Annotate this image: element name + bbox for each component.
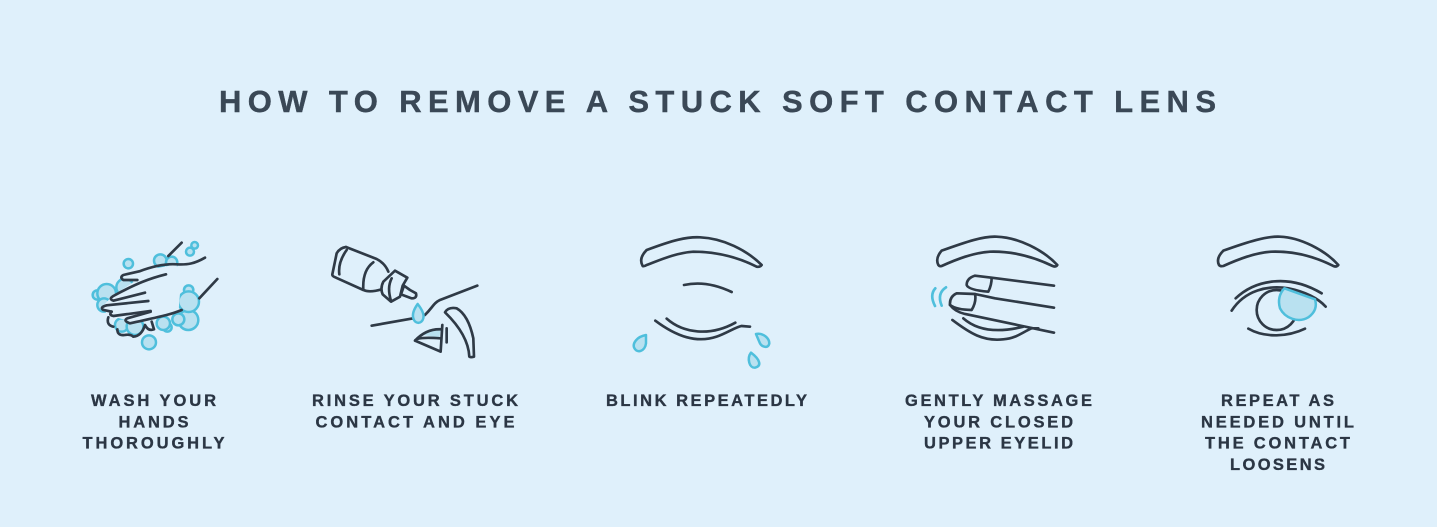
label: massage — [905, 392, 1092, 452]
label: massage: UPPER EYELID — [924, 434, 1073, 452]
title: HOW TO REMOVE A STUCK SOFT CONTACT LENS — [219, 84, 1216, 119]
step 1: wash your hands — [82, 242, 224, 452]
label: rinse: CONTACT AND EYE — [316, 414, 514, 432]
label: rinse: RINSE YOUR STUCK — [312, 392, 518, 410]
label: rinse — [312, 392, 518, 432]
label: repeat: REPEAT AS — [1221, 392, 1334, 410]
label: wash your hands — [82, 392, 224, 452]
icon: soapy hands — [93, 242, 217, 349]
label: repeat: THE CONTACT — [1205, 434, 1350, 452]
step 5: repeat — [1201, 237, 1354, 474]
step 2: rinse — [312, 247, 518, 432]
label: repeat: LOOSENS — [1230, 456, 1325, 474]
label: wash your hands: THOROUGHLY — [82, 434, 224, 452]
label: repeat: NEEDED UNTIL — [1201, 414, 1354, 432]
icon: blinking eye with tears — [634, 237, 769, 368]
label: repeat — [1201, 392, 1354, 474]
label: massage: GENTLY MASSAGE — [905, 392, 1092, 410]
step 4: massage — [905, 237, 1092, 452]
icon: eye drop bottle and eye — [332, 247, 477, 357]
label: blink: BLINK REPEATEDLY — [606, 392, 807, 410]
icon: fingers massaging eyelid — [932, 237, 1057, 340]
label: massage: YOUR CLOSED — [924, 414, 1073, 432]
icon: eye with loosened contact lens — [1218, 237, 1338, 335]
label: wash your hands: WASH YOUR — [91, 392, 216, 410]
label: wash your hands: HANDS — [118, 414, 188, 432]
step 3: blink — [606, 237, 807, 410]
